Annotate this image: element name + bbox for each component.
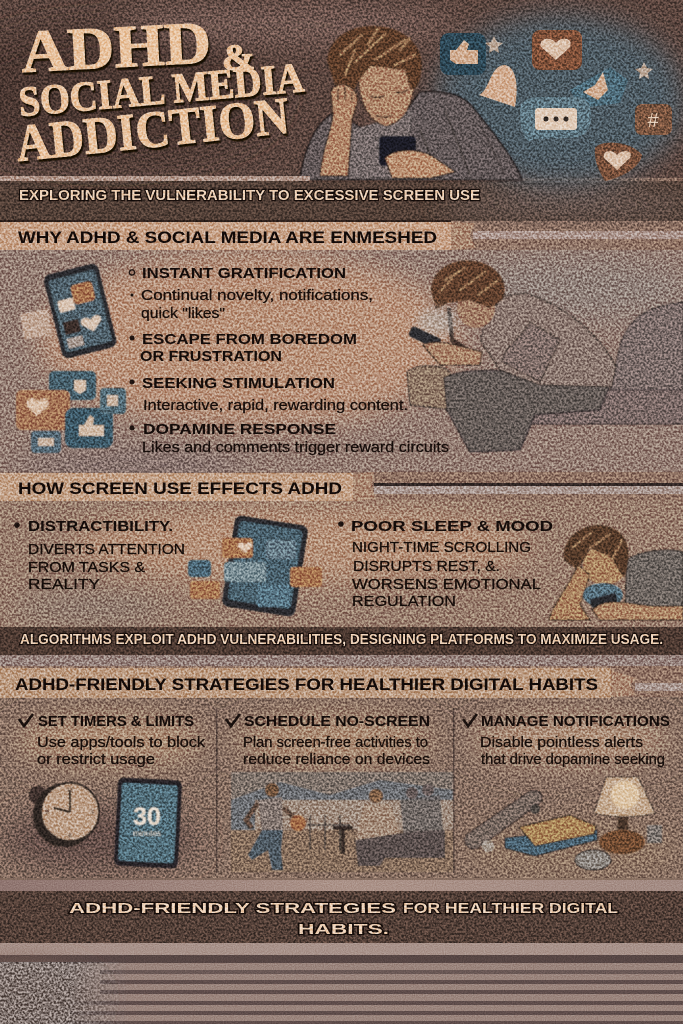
text: notifications: Disable pointless alerts [480, 735, 643, 751]
illustration: skateboard books and lamp [465, 777, 662, 870]
text: notifications: that drive dopamine seeking [481, 752, 665, 768]
section 1 ribbon: WHY ADHD & SOCIAL MEDIA ARE ENMESHED [18, 228, 437, 247]
text: schedule: Plan screen-free activities to [243, 735, 428, 751]
callout: algorithms band [0, 627, 683, 666]
text: novelty: Continual novelty, notifications, [141, 288, 373, 304]
text: seeking stimulation [130, 375, 408, 414]
text: poor sleep and mood: WORSENS EMOTIONAL [352, 577, 541, 593]
header panel [13, 9, 672, 181]
icon: phone with apps [11, 262, 118, 367]
text: poor sleep and mood: POOR SLEEP & MOOD [351, 518, 553, 535]
illustration: man looking at phone [300, 26, 522, 180]
icon: hashtag badge: # [647, 110, 659, 132]
icon: heart bubble [532, 30, 582, 70]
icon: heart bubble two [595, 143, 642, 181]
text: dopamine response: Likes and comments trigger reward circuits [142, 440, 449, 456]
illustration: man slumped on sofa [407, 260, 683, 452]
icon: phone with notifications [188, 515, 322, 617]
text: poor sleep and mood: REGULATION [352, 594, 456, 610]
footer text: ADHD-FRIENDLY STRATEGIES [69, 900, 396, 917]
striped bottom [0, 955, 683, 1024]
text: dopamine response: DOPAMINE RESPONSE [143, 421, 336, 438]
subtitle band: EXPLORING THE VULNERABILITY TO EXCESSIVE SCREEN USE [19, 187, 480, 204]
icon: thumbs up bubble [440, 33, 486, 75]
text: poor sleep and mood [338, 518, 553, 610]
panel: why enmeshed [11, 260, 683, 456]
panel: strategies [19, 708, 670, 873]
icons: floating social media bubbles [440, 30, 672, 181]
text: novelty [130, 288, 373, 322]
text: timers [19, 713, 206, 768]
section 1 ribbon [0, 220, 683, 250]
text: seeking stimulation: SEEKING STIMULATION [142, 375, 335, 392]
section 3 ribbon [0, 668, 683, 698]
text: seeking stimulation: Interactive, rapid, rewarding content. [143, 398, 408, 414]
text: schedule [226, 713, 430, 768]
icon: social reaction bubbles [16, 371, 126, 453]
text: distractibility [14, 518, 185, 593]
column: manage notifications [463, 713, 670, 870]
text: escape: ESCAPE FROM BOREDOM [142, 331, 357, 348]
text: dopamine response [130, 421, 449, 456]
illustration: outdoor play and friends [231, 772, 453, 872]
text: escape: OR FRUSTRATION [140, 348, 282, 365]
footer text [69, 900, 618, 938]
column: schedule no-screen [226, 713, 453, 872]
text: distractibility: DIVERTS ATTENTION [28, 542, 185, 558]
title: SOCIAL MEDIA [17, 55, 306, 126]
text: escape [130, 331, 357, 365]
text: timers: or restrict usage [37, 752, 155, 768]
title: & [221, 36, 256, 78]
section 3 ribbon: ADHD-FRIENDLY STRATEGIES FOR HEALTHIER DIGITAL HABITS [15, 675, 598, 694]
title: ADHD [19, 9, 212, 85]
text: novelty: quick "likes" [141, 306, 225, 322]
text: notifications: MANAGE NOTIFICATIONS [481, 713, 670, 730]
text: distractibility: DISTRACTIBILITY. [28, 518, 173, 535]
icon: thumbs up bubble two [570, 67, 628, 108]
text: instant gratification: INSTANT GRATIFICATION [142, 265, 346, 282]
text: poor sleep and mood: DISRUPTS REST, &. [353, 559, 500, 575]
icon: phone 30 minutes timer: minutes [133, 829, 161, 838]
footer text: HABITS. [298, 921, 389, 938]
icon: alarm clock: 3 [90, 810, 94, 816]
text: poor sleep and mood: NIGHT-TIME SCROLLING [352, 540, 531, 556]
footer text: FOR HEALTHIER DIGITAL [403, 900, 618, 917]
icon: alarm clock: 12 [67, 788, 74, 794]
footer band [0, 880, 683, 955]
text: schedule: reduce reliance on devices [243, 752, 430, 768]
text: distractibility: REALITY [28, 577, 100, 593]
text: schedule: SCHEDULE NO-SCREEN [244, 713, 430, 730]
text: timers: Use apps/tools to block [37, 735, 206, 751]
icon: alarm clock: 9 [45, 810, 49, 816]
icon: chat bubble [520, 97, 591, 141]
section 2 ribbon [0, 472, 683, 501]
icon: stars [485, 36, 653, 79]
text: distractibility: FROM TASKS & [28, 560, 145, 576]
section 2 ribbon: HOW SCREEN USE EFFECTS ADHD [18, 479, 342, 498]
panel: how screen use affects [14, 515, 683, 620]
text: timers: SET TIMERS & LIMITS [38, 713, 194, 730]
icon: alarm clock: 6 [68, 834, 72, 840]
icon: bell [479, 65, 517, 107]
list: why enmeshed text [129, 265, 449, 456]
icon: hashtag badge [635, 104, 672, 135]
title: ADDICTION [13, 88, 292, 173]
icon: alarm clock [29, 783, 99, 847]
icon: phone 30 minutes timer: 30 [133, 803, 161, 831]
illustration: tired man with phone [549, 525, 683, 620]
icon: phone 30 minutes timer [114, 777, 182, 869]
column: set timers and limits [19, 713, 206, 869]
subtitle band [0, 176, 480, 204]
text: notifications [463, 713, 670, 768]
title [13, 9, 306, 173]
